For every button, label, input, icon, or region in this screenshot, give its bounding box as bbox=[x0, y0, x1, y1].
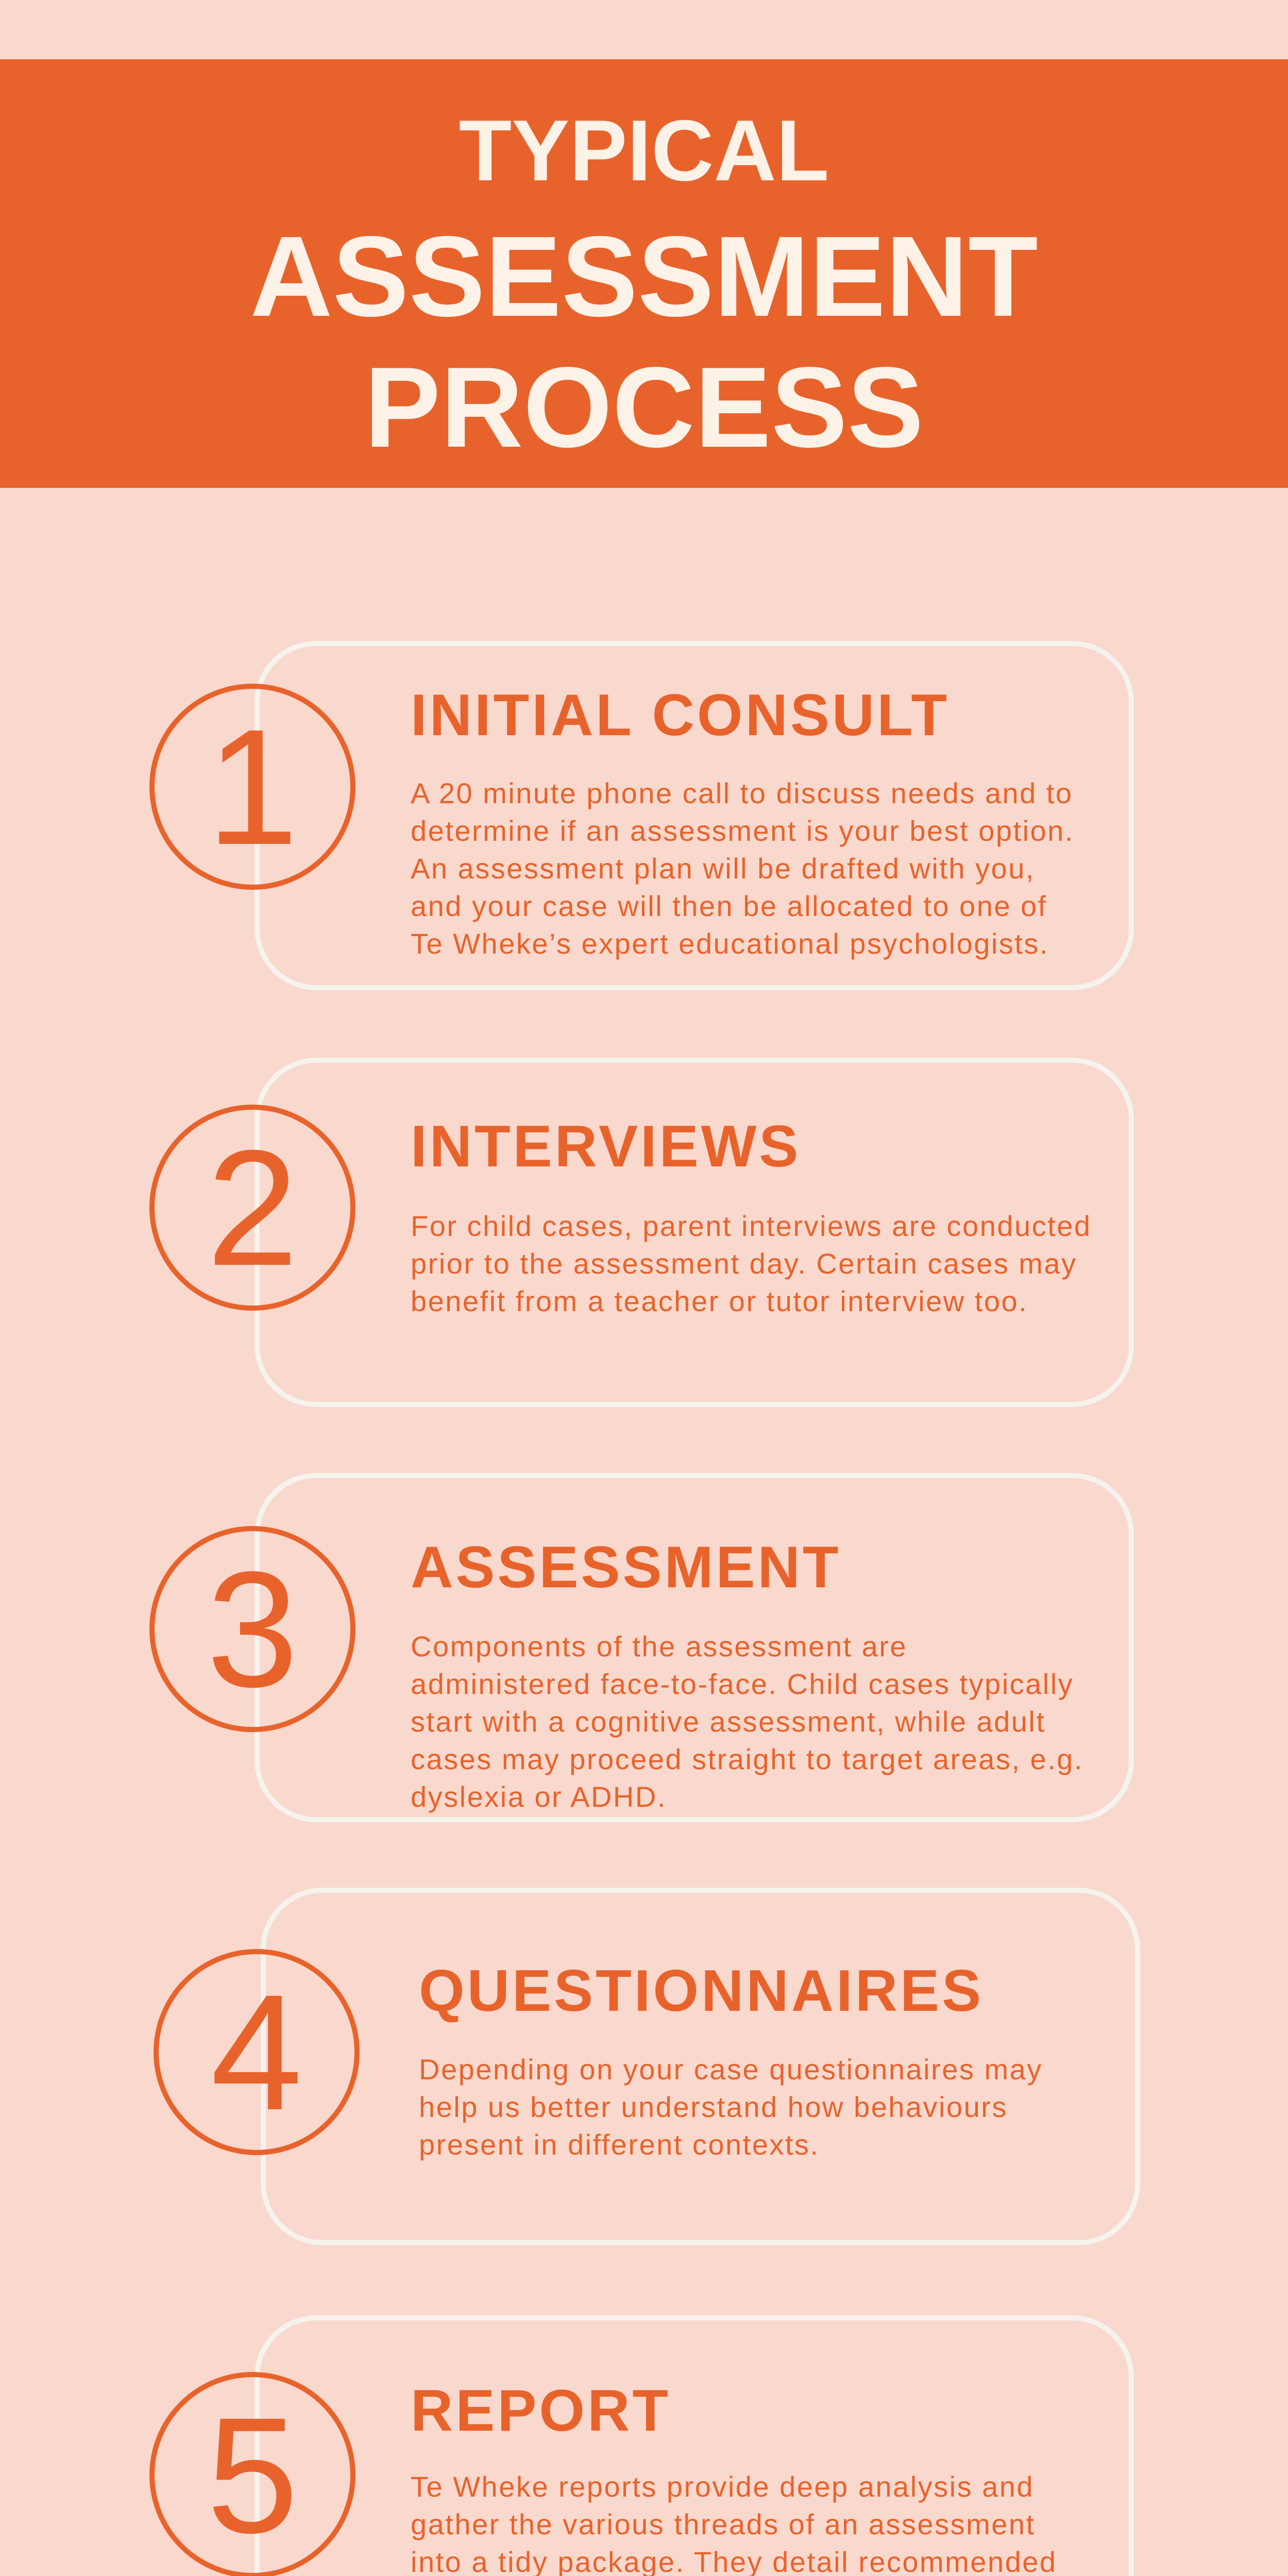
title bbox=[250, 102, 1038, 471]
text: assessment: start with a cognitive assessment, while adult bbox=[411, 1705, 1045, 1738]
text: questionnaires: Depending on your case questionnaires may bbox=[419, 2053, 1043, 2086]
heading: report: REPORT bbox=[411, 2378, 671, 2444]
title: ASSESSMENT bbox=[250, 213, 1038, 341]
text: questionnaires: help us better understand how behaviours bbox=[419, 2091, 1008, 2123]
text: assessment: Components of the assessment are bbox=[411, 1630, 907, 1663]
heading: questionnaires: QUESTIONNAIRES bbox=[419, 1958, 984, 2024]
text: initial consult: A 20 minute phone call to discuss needs and to bbox=[411, 777, 1073, 809]
text: initial consult: and your case will then be allocated to one of bbox=[411, 890, 1047, 922]
text: questionnaires: present in different contexts. bbox=[419, 2128, 819, 2161]
icon: number 3 circle: 3 bbox=[207, 1537, 298, 1721]
icon: number 2 circle bbox=[149, 1105, 355, 1311]
text: initial consult: determine if an assessment is your best option. bbox=[411, 815, 1074, 847]
text: questionnaires bbox=[419, 2053, 1043, 2161]
heading: interviews: INTERVIEWS bbox=[411, 1114, 801, 1179]
panel: step 2 interviews bbox=[149, 1058, 1134, 1407]
icon: number 5 circle: 5 bbox=[207, 2383, 298, 2567]
text: assessment: administered face-to-face. Child cases typically bbox=[411, 1668, 1074, 1700]
icon: number 1 circle: 1 bbox=[207, 694, 298, 879]
icon: number 4 circle bbox=[154, 1949, 360, 2155]
icon: number 3 circle bbox=[149, 1526, 355, 1732]
panel: step 3 assessment bbox=[149, 1473, 1134, 1822]
text: initial consult: Te Wheke’s expert educational psychologists. bbox=[411, 927, 1049, 960]
text: report bbox=[411, 2470, 1057, 2576]
icon: number 1 circle bbox=[149, 684, 355, 890]
text: assessment: dyslexia or ADHD. bbox=[411, 1781, 667, 1813]
panel: step 5 report bbox=[149, 2315, 1134, 2576]
icon: number 4 circle: 4 bbox=[211, 1960, 302, 2144]
text: interviews: benefit from a teacher or tutor interview too. bbox=[411, 1285, 1028, 1317]
text: assessment: cases may proceed straight to target areas, e.g. bbox=[411, 1743, 1083, 1775]
title: TYPICAL bbox=[459, 102, 829, 199]
text: report: gather the various threads of an assessment bbox=[411, 2508, 1036, 2540]
icon: number 5 circle bbox=[149, 2372, 355, 2576]
heading: assessment: ASSESSMENT bbox=[411, 1535, 841, 1600]
header banner bbox=[0, 59, 1288, 488]
text: assessment bbox=[411, 1630, 1083, 1813]
icon: number 2 circle: 2 bbox=[207, 1115, 298, 1300]
text: report: Te Wheke reports provide deep analysis and bbox=[411, 2470, 1034, 2503]
text: initial consult: An assessment plan will be drafted with you, bbox=[411, 852, 1035, 885]
heading: initial consult: INITIAL CONSULT bbox=[411, 683, 950, 748]
text: interviews: prior to the assessment day. Certain cases may bbox=[411, 1247, 1077, 1280]
panel: step 4 questionnaires bbox=[154, 1888, 1140, 2245]
text: initial consult bbox=[411, 777, 1074, 960]
text: interviews bbox=[411, 1210, 1091, 1317]
title: PROCESS bbox=[364, 344, 924, 471]
text: interviews: For child cases, parent interviews are conducted bbox=[411, 1210, 1091, 1242]
panel: step 1 initial consult bbox=[149, 641, 1134, 990]
